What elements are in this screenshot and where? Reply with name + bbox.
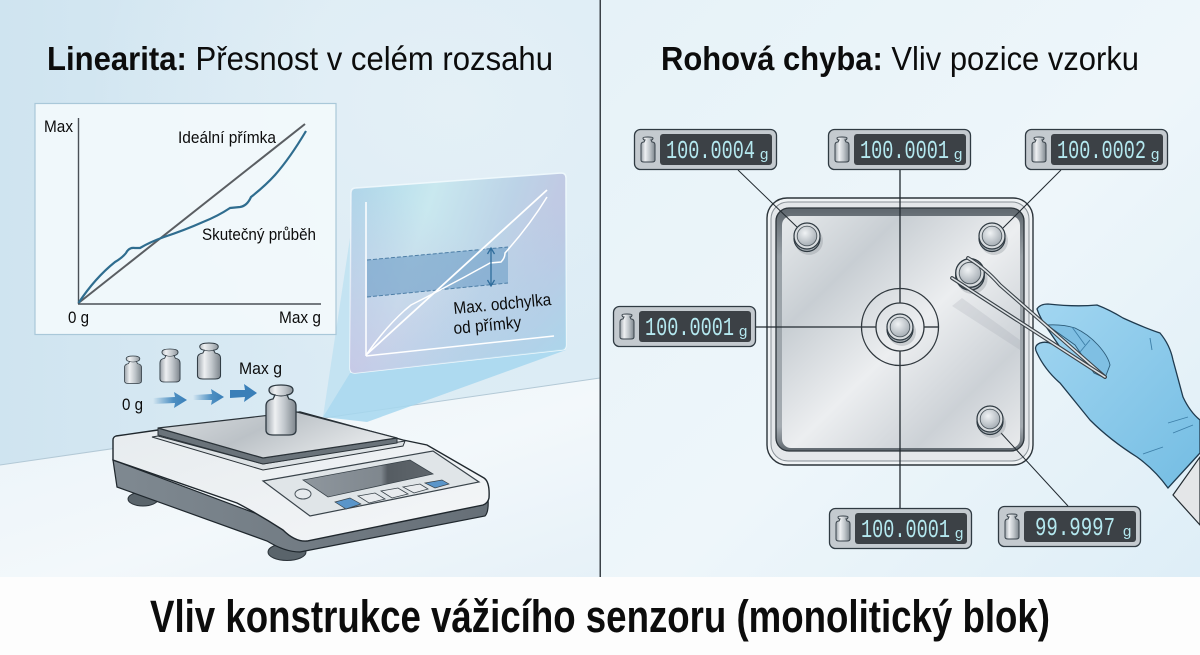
footer band [0,577,1200,655]
blue button right [425,480,449,488]
readout: top left [634,130,776,170]
balance pan [152,412,405,470]
light beam from balance to glass panel [323,238,566,422]
leader lines [738,170,1068,508]
grey buttons [358,484,428,503]
arrow: step one [153,392,187,408]
chart: linearity curve [35,104,336,334]
readout: top right: g [1151,146,1159,163]
readout: bottom right: g [1123,523,1131,540]
readout: centre left: 100.0001 [645,313,734,343]
laboratory balance [113,385,489,560]
readout: bottom right [998,506,1140,546]
icon: weight on pan [266,385,296,435]
sample: top right [979,223,1008,255]
icon: large weight [197,343,221,379]
readout: bottom right: 99.9997 [1035,513,1115,543]
panel: corner error background [601,0,1200,577]
sample: bottom right [977,406,1006,438]
arrow: step two [193,389,224,405]
axis label: Max: Max [44,117,73,136]
heading: corner error: Rohová chyba: Vliv pozice vzorku [661,40,1139,77]
label: ideal line: Ideální přímka [178,128,276,147]
divider between panels [600,0,601,577]
label: Max g: Max g [239,359,282,378]
readout: bottom centre: 100.0001 [861,515,950,545]
label: actual curve: Skutečný průběh [202,225,316,244]
arrow: maximum deviation [488,248,494,286]
tweezers shadow on plate [952,298,1020,350]
label: 0 g: 0 g [122,395,143,414]
blue button left [335,498,361,509]
target rings at pan centre [862,288,938,366]
panel: linearity background [0,0,600,577]
readout: top centre: g [954,146,962,163]
axis label: 0 g: 0 g [68,308,89,327]
balance level indicator [295,489,311,499]
readout: top centre: 100.0001 [860,136,949,166]
readout: top left: g [760,146,768,163]
balance upper housing [113,412,489,541]
label: from the line: od přímky [453,313,523,338]
glove finger pocket [1047,325,1110,378]
sample: top left [794,223,823,255]
heading: linearity: Linearita: Přesnost v celém rozsahu [47,40,553,77]
readout: top right [1026,130,1168,170]
axis label: Max g: Max g [279,308,321,327]
gloved hand with tweezers [952,258,1200,525]
icon: small weight [124,356,142,384]
readout: centre left: g [739,323,747,340]
glove creases [1072,327,1193,454]
weights progression [122,343,282,414]
blue glove [1036,304,1200,488]
panel: glass magnified chart [350,173,566,373]
label: maximum deviation: Max. odchylka [453,290,552,318]
lab coat sleeve [1173,457,1200,525]
readout: top centre [828,130,970,170]
readout: top left: 100.0004 [666,136,755,166]
readout: bottom centre: g [955,525,963,542]
readout: top right: 100.0002 [1057,136,1146,166]
sample held by tweezers [956,259,988,294]
balance feet [128,492,306,560]
sample: centre [887,314,916,346]
balance control panel [263,451,479,516]
icon: medium weight [160,349,180,382]
tweezers [952,258,1105,377]
balance display [303,460,433,497]
balance lower housing [113,460,488,552]
balance pan top view [767,198,1033,465]
readout: bottom centre [830,508,972,548]
arrow: step three [230,384,257,402]
readout: centre left [614,306,756,346]
